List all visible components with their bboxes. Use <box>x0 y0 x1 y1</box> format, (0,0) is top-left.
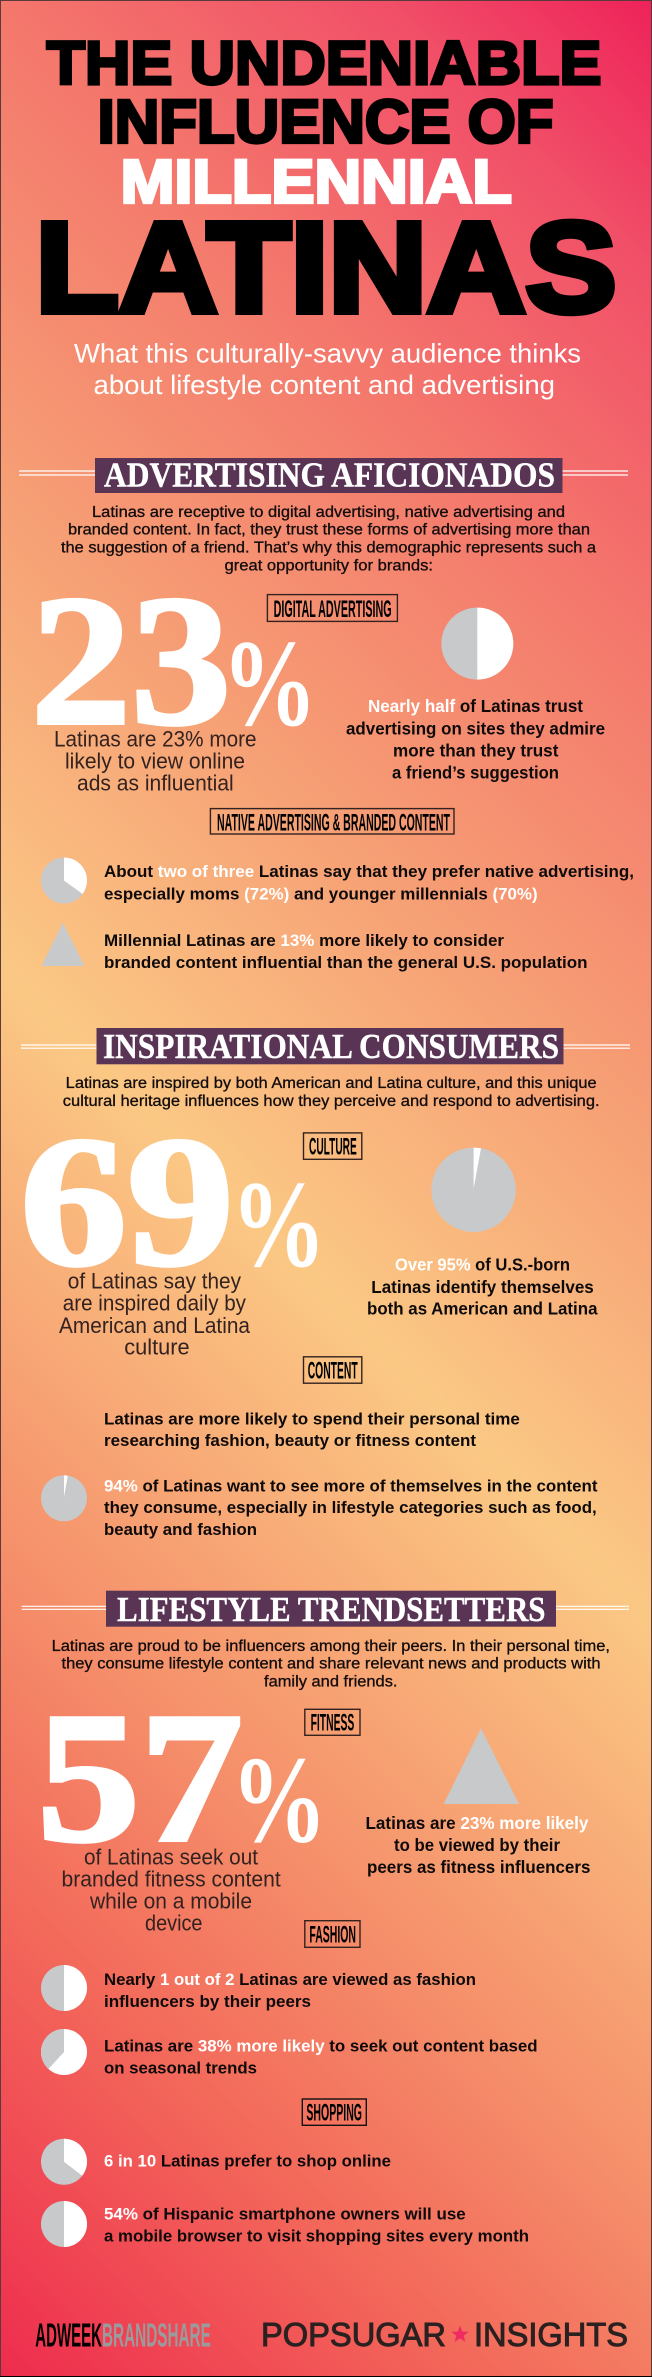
nearly half text: a friend’s suggestion <box>392 763 559 783</box>
nearly half text: more than they trust <box>393 740 559 760</box>
title: MILLENNIAL <box>121 147 512 215</box>
over 95 percent text: both as American and Latina <box>367 1299 598 1319</box>
triangle: 13 percent <box>42 923 84 966</box>
stat caption: American and Latina <box>59 1313 251 1338</box>
two of three text: About two of three Latinas say that they prefer native advertising, <box>104 863 634 881</box>
stat caption: Latinas are 23% more <box>54 726 256 751</box>
nearly half text: advertising on sites they admire <box>346 718 605 738</box>
nearly half text <box>346 696 605 783</box>
pie: 1 out of 2 <box>41 1965 87 2011</box>
intro text: they consume lifestyle content and share relevant news and products with <box>62 1656 600 1673</box>
1 out of 2 text <box>104 1971 476 2011</box>
label: content <box>304 1357 362 1385</box>
logo: adweek brandshare: ADWEEK <box>35 2317 102 2354</box>
section: lifestyle trendsetters: FITNESS <box>311 1710 354 1737</box>
big stat: 69% <box>20 1099 326 1305</box>
stat caption <box>54 726 256 796</box>
1 out of 2 text: Nearly 1 out of 2 Latinas are viewed as fashion <box>104 1971 476 1989</box>
label: fashion <box>305 1921 360 1948</box>
big stat: 57%: % <box>231 1732 327 1869</box>
intro text <box>52 1638 610 1691</box>
intro text: family and friends. <box>264 1674 398 1691</box>
section: inspirational consumers: CULTURE <box>309 1133 357 1160</box>
intro text <box>61 504 596 574</box>
intro text: Latinas are inspired by both American and Latina culture, and this unique <box>66 1075 597 1092</box>
big stat: 23%: % <box>222 615 317 752</box>
54 percent text: a mobile browser to visit shopping sites every month <box>104 2228 529 2246</box>
title: INFLUENCE OF <box>98 87 553 155</box>
label: shopping <box>302 2099 366 2127</box>
fitness influencers text: Latinas are 23% more likely <box>366 1813 589 1833</box>
13 percent text <box>104 932 588 972</box>
pie: over 95 percent <box>431 1148 516 1232</box>
intro text: great opportunity for brands: <box>224 557 433 574</box>
big stat: 57%: 57 <box>37 1675 243 1881</box>
over 95 percent text: Latinas identify themselves <box>371 1277 594 1297</box>
94 percent text: 94% of Latinas want to see more of themselves in the content <box>104 1477 598 1495</box>
logo: popsugar insights <box>261 2316 628 2353</box>
bottom edge <box>0 2376 652 2377</box>
intro text: the suggestion of a friend. That’s why this demographic represents such a <box>61 540 596 556</box>
pie: two of three <box>41 858 87 904</box>
title <box>36 29 616 340</box>
intro text: branded content. In fact, they trust these forms of advertising more than <box>68 522 590 539</box>
section: advertising aficionados <box>19 455 634 972</box>
section: advertising aficionados: DIGITAL ADVERTISING <box>274 596 392 623</box>
subtitle: about lifestyle content and advertising <box>94 370 555 400</box>
label: fitness <box>305 1709 360 1737</box>
logo: popsugar insights: INSIGHTS <box>474 2316 628 2353</box>
section: inspirational consumers <box>20 1027 630 1539</box>
logo: popsugar insights: POPSUGAR <box>261 2316 446 2353</box>
pie: 54 percent <box>41 2201 87 2247</box>
stat caption: while on a mobile <box>89 1888 252 1913</box>
title: THE UNDENIABLE <box>47 29 601 97</box>
section: lifestyle trendsetters: FASHION <box>309 1921 356 1948</box>
stat caption: of Latinas seek out <box>84 1844 258 1869</box>
fitness influencers text: to be viewed by their <box>394 1835 560 1855</box>
subtitle <box>74 339 581 400</box>
personal time text: researching fashion, beauty or fitness content <box>104 1432 477 1450</box>
section heading: ADVERTISING AFICIONADOS <box>104 455 555 494</box>
38 percent text: on seasonal trends <box>104 2060 257 2078</box>
intro text: Latinas are receptive to digital advertising, native advertising and <box>92 504 565 521</box>
stat caption: are inspired daily by <box>63 1291 246 1316</box>
stat caption <box>62 1844 281 1936</box>
section: lifestyle trendsetters: SHOPPING <box>306 2100 362 2127</box>
section heading: LIFESTYLE TRENDSETTERS <box>117 1590 546 1629</box>
big stat: 23%: 23 <box>31 558 231 764</box>
nearly half text: Nearly half of Latinas trust <box>368 696 583 716</box>
title: LATINAS <box>36 196 616 340</box>
label: native advertising and branded content <box>210 809 454 837</box>
stat caption: ads as influential <box>77 771 234 796</box>
pie: 6 in 10 <box>41 2139 87 2185</box>
stat caption: of Latinas say they <box>68 1269 241 1294</box>
54 percent text <box>104 2205 529 2246</box>
stat caption: branded fitness content <box>62 1867 281 1892</box>
stat caption: culture <box>124 1334 190 1359</box>
54 percent text: 54% of Hispanic smartphone owners will use <box>104 2205 466 2223</box>
pie: 38 percent <box>41 2029 87 2075</box>
over 95 percent text <box>367 1255 598 1319</box>
stat caption: likely to view online <box>65 749 245 774</box>
stat caption <box>59 1269 251 1359</box>
two of three text: especially moms (72%) and younger millennials (70%) <box>104 885 538 903</box>
personal time text <box>104 1410 520 1450</box>
fitness influencers text <box>366 1813 591 1877</box>
triangle: 23 percent more likely <box>444 1728 519 1804</box>
over 95 percent text: Over 95% of U.S.-born <box>395 1255 570 1275</box>
fitness influencers text: peers as fitness influencers <box>367 1857 591 1877</box>
big stat: 69%: 69 <box>20 1099 234 1305</box>
pie: nearly half <box>441 608 513 680</box>
stat caption: device <box>145 1911 202 1936</box>
6 in 10 text: 6 in 10 Latinas prefer to shop online <box>104 2153 391 2171</box>
infographic: BRANDSHARE <box>102 2317 211 2354</box>
intro text: cultural heritage influences how they perceive and respond to advertising. <box>63 1093 600 1110</box>
1 out of 2 text: influencers by their peers <box>104 1993 311 2011</box>
pie: 94 percent <box>41 1475 87 1521</box>
two of three text <box>104 863 634 903</box>
section: lifestyle trendsetters <box>22 1590 629 2247</box>
section heading: INSPIRATIONAL CONSUMERS <box>103 1027 559 1066</box>
38 percent text <box>104 2038 538 2078</box>
label: culture <box>304 1133 362 1160</box>
38 percent text: Latinas are 38% more likely to seek out content based <box>104 2038 538 2056</box>
big stat: 23% <box>31 558 317 764</box>
13 percent text: Millennial Latinas are 13% more likely to consider <box>104 932 505 950</box>
subtitle: What this culturally-savvy audience thinks <box>74 339 581 369</box>
label: digital advertising <box>267 595 397 623</box>
94 percent text: they consume, especially in lifestyle categories such as food, <box>104 1499 597 1517</box>
13 percent text: branded content influential than the general U.S. population <box>104 954 588 972</box>
94 percent text <box>104 1477 598 1539</box>
big stat: 69%: % <box>231 1156 326 1293</box>
personal time text: Latinas are more likely to spend their personal time <box>104 1410 520 1428</box>
big stat: 57% <box>37 1675 327 1881</box>
intro text: Latinas are proud to be influencers among their peers. In their personal time, <box>52 1638 610 1655</box>
94 percent text: beauty and fashion <box>104 1521 257 1539</box>
intro text <box>63 1075 600 1110</box>
section: inspirational consumers: CONTENT <box>308 1358 358 1385</box>
